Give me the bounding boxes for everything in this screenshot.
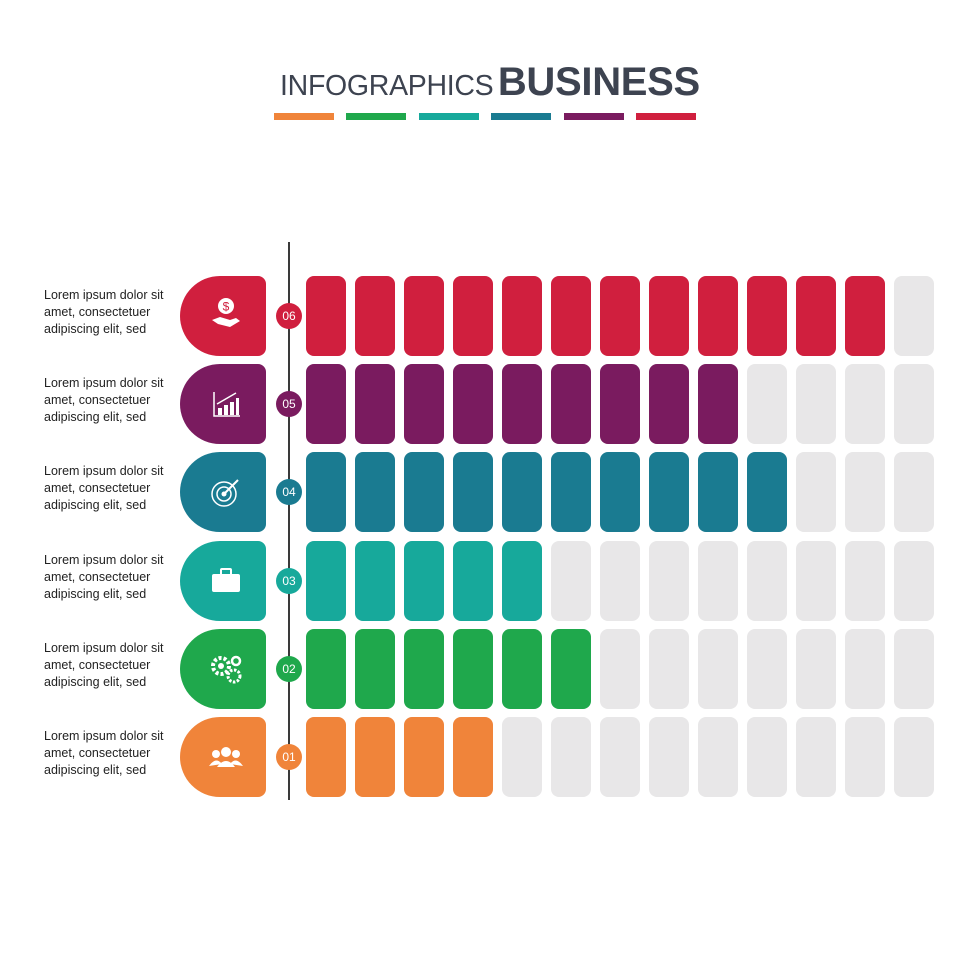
row 04 xyxy=(44,452,302,532)
row 05 xyxy=(44,364,302,444)
row 03: Lorem ipsum dolor sit amet, consectetuer adipiscing elit, sed xyxy=(44,553,164,601)
vertical axis line xyxy=(288,242,290,800)
bar cells xyxy=(306,276,934,797)
row 06 xyxy=(44,276,302,356)
row 04: Lorem ipsum dolor sit amet, consectetuer adipiscing elit, sed xyxy=(44,464,164,512)
row 02: Lorem ipsum dolor sit amet, consectetuer adipiscing elit, sed xyxy=(44,641,164,689)
icon: chart xyxy=(213,392,240,417)
icon: people xyxy=(209,747,243,767)
row 04 cells xyxy=(306,452,934,532)
row 01: Lorem ipsum dolor sit amet, consectetuer adipiscing elit, sed xyxy=(44,729,164,777)
row 03: 03 xyxy=(282,574,296,588)
row 01: 01 xyxy=(282,750,296,764)
row 02 cells xyxy=(306,629,934,709)
row 01 cells xyxy=(306,717,934,797)
title: INFOGRAPHICS BUSINESS xyxy=(280,60,700,104)
row 05 cells xyxy=(306,364,934,444)
icon: money hand xyxy=(212,298,240,327)
row labels xyxy=(44,276,302,797)
row 06: Lorem ipsum dolor sit amet, consectetuer adipiscing elit, sed xyxy=(44,288,164,336)
row 02 xyxy=(44,629,302,709)
icon: target xyxy=(211,479,239,507)
row 02: 02 xyxy=(282,662,296,676)
color legend bars xyxy=(274,113,696,120)
icon: gears xyxy=(211,656,242,684)
row 04: 04 xyxy=(282,485,296,499)
icon: money hand: $ xyxy=(223,300,230,314)
row 01 xyxy=(44,717,302,797)
row 03 xyxy=(44,541,302,621)
row 05: 05 xyxy=(282,397,296,411)
row 06: 06 xyxy=(282,309,296,323)
icon: briefcase xyxy=(212,568,240,592)
row 03 cells xyxy=(306,541,934,621)
row 06 cells xyxy=(306,276,934,356)
row 05: Lorem ipsum dolor sit amet, consectetuer adipiscing elit, sed xyxy=(44,376,164,424)
